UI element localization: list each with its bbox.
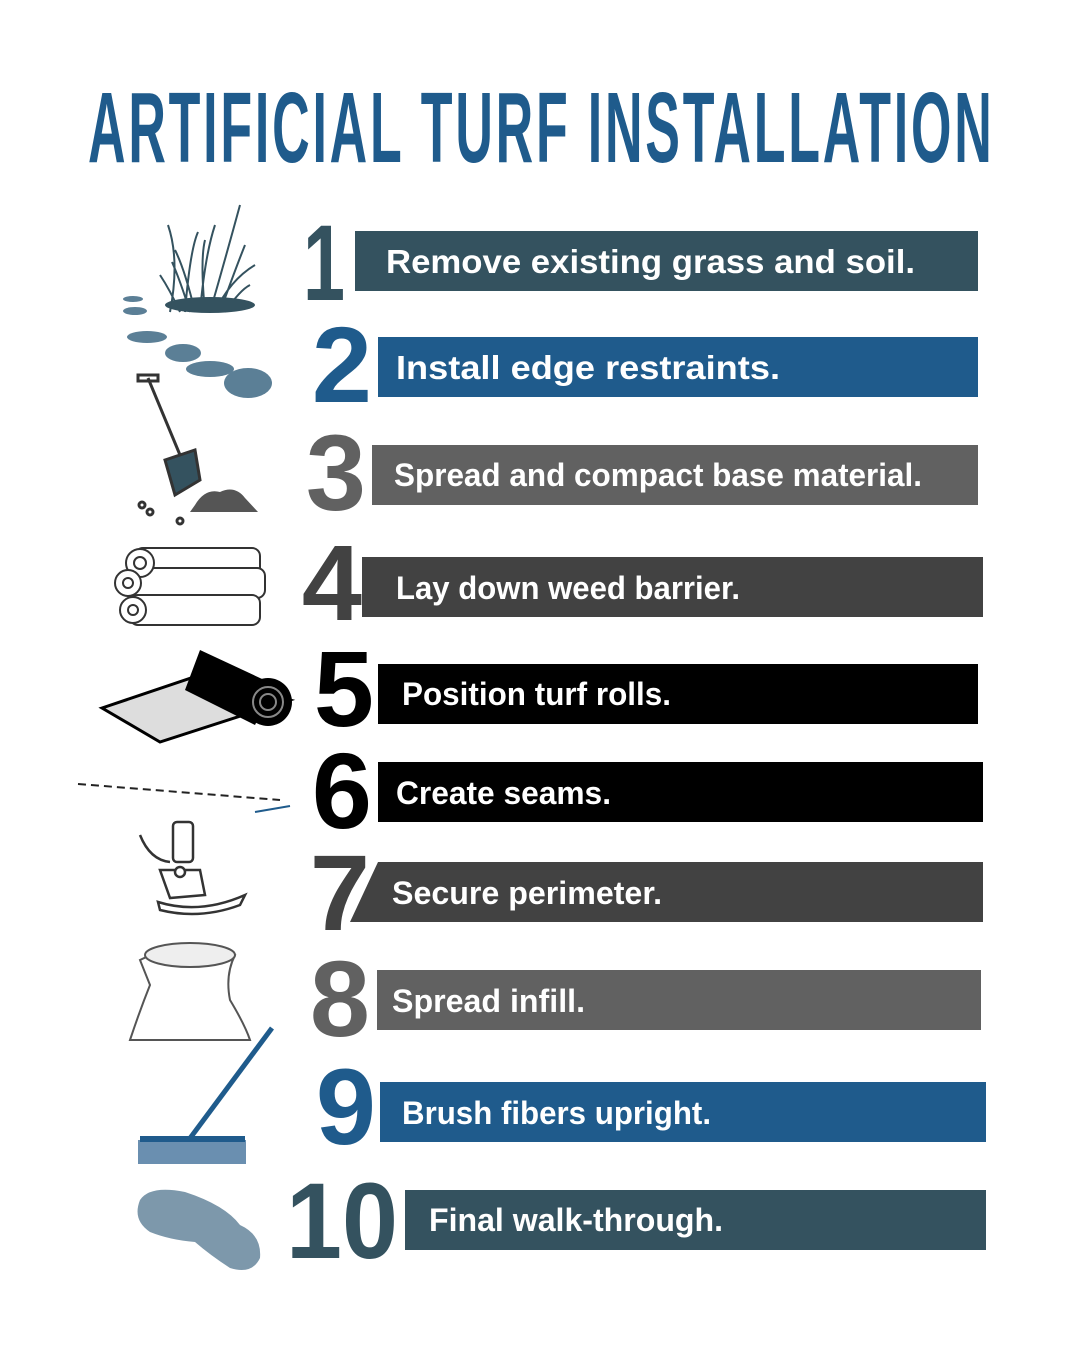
title: ARTIFICIAL TURF INSTALLATION [88,72,992,183]
step 8 [310,938,981,1059]
step 1: Remove existing grass and soil. [386,243,915,280]
step 6: 6 [312,730,372,851]
step 7: Secure perimeter. [392,875,662,911]
step 8: 8 [310,938,370,1059]
icon: footprint [138,1190,260,1270]
step 9 [316,1046,986,1167]
icon: stepping stones [123,296,272,398]
step 7: 7 [310,832,370,953]
icon: seam line [78,784,290,812]
icon: shovel [138,375,258,524]
step 2: Install edge restraints. [396,349,780,386]
icon: push broom [138,1028,272,1164]
step 7 [310,832,983,953]
step 6: Create seams. [396,775,611,811]
step 5 [314,628,978,749]
step 4 [302,522,983,643]
step 5: Position turf rolls. [402,676,671,712]
step 2 [312,304,978,425]
step 3: 3 [306,412,366,533]
step 5: 5 [314,628,374,749]
icon: sewing foot [140,822,245,914]
icon: sack [130,943,250,1040]
step 1 [303,202,978,323]
step 1: 1 [303,202,345,323]
step 10 [286,1160,986,1281]
step 10: Final walk-through. [429,1202,723,1238]
icon: logs [115,548,265,625]
step 3: Spread and compact base material. [394,457,922,493]
step 9: Brush fibers upright. [402,1095,711,1131]
icon: grass [160,205,255,313]
step 10: 10 [286,1160,398,1281]
step 4: Lay down weed barrier. [396,570,740,606]
step 8: Spread infill. [392,983,585,1019]
step 4: 4 [302,522,362,643]
step 6 [312,730,983,851]
step 9: 9 [316,1046,376,1167]
step 2: 2 [312,304,372,425]
step 3 [306,412,978,533]
icon: turf roll [102,650,292,742]
